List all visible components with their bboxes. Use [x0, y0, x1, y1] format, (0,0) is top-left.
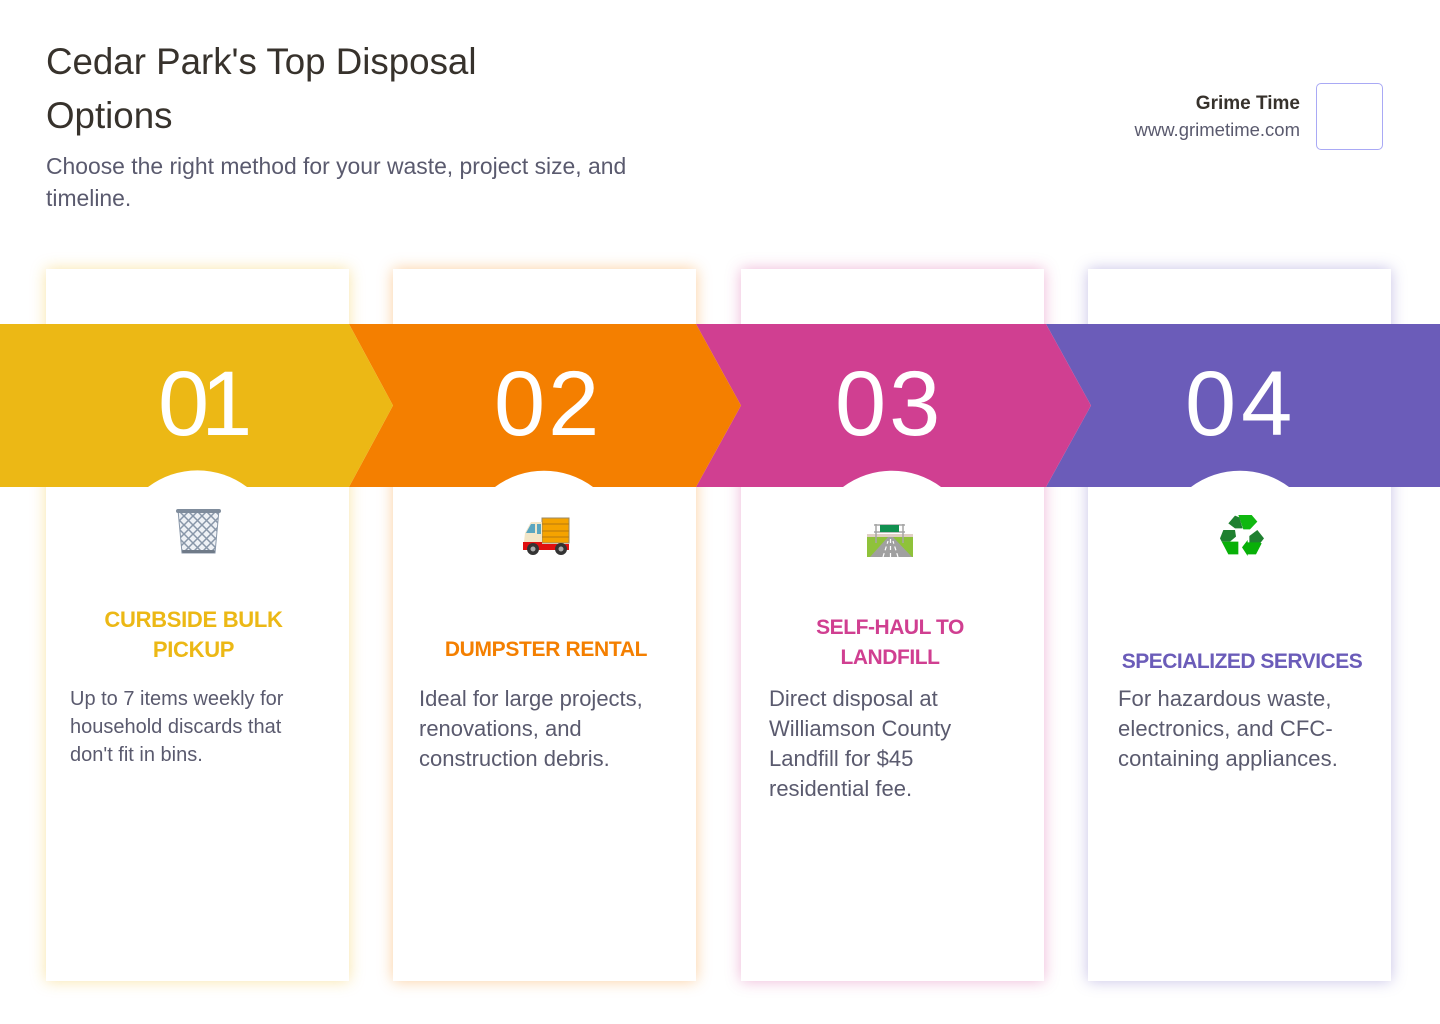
subtitle: Choose the right method for your waste, project size, and [46, 153, 626, 179]
subtitle [46, 153, 626, 211]
number 04: 04 [1185, 353, 1297, 455]
chevron band [0, 324, 1440, 487]
chevron 4 [1046, 324, 1440, 487]
card 3 heading [816, 616, 964, 669]
card 4 heading: SPECIALIZED SERVICES [1122, 650, 1362, 673]
card 4 description: electronics, and CFC- [1118, 716, 1333, 741]
card 3 description: Landfill for $45 [769, 746, 913, 771]
chevron 1 [0, 324, 393, 487]
card 3 background [741, 269, 1044, 981]
card 3 description: residential fee. [769, 776, 912, 801]
card 2 heading: DUMPSTER RENTAL [445, 638, 647, 661]
card 1 description [70, 688, 284, 766]
card 3 description: Williamson County [769, 716, 951, 741]
card 2 description: Ideal for large projects, [419, 686, 643, 711]
card 1 heading [104, 607, 283, 662]
card 1 description: household discards that [70, 716, 281, 738]
brand url: www.grimetime.com [1134, 119, 1300, 140]
card 3 heading: SELF-HAUL TO [816, 616, 964, 639]
card 1 heading: PICKUP [153, 637, 234, 662]
subtitle: timeline. [46, 185, 131, 211]
brand block [1134, 83, 1383, 150]
icon: motorway [867, 524, 913, 557]
card 1 description: don't fit in bins. [70, 744, 203, 766]
card 4 background [1088, 269, 1391, 981]
chevron 2 [349, 324, 741, 487]
card 3 heading: LANDFILL [840, 646, 940, 669]
number 02: 02 [494, 353, 602, 455]
card 1 background [46, 269, 349, 981]
title: Options [46, 95, 172, 136]
card 1 description: Up to 7 items weekly for [70, 688, 283, 710]
card 4 description: For hazardous waste, [1118, 686, 1332, 711]
icon: wastebasket [176, 509, 221, 554]
icon: recycling symbol [1220, 515, 1264, 556]
card 2 description: construction debris. [419, 746, 610, 771]
card 4 description: containing appliances. [1118, 746, 1338, 771]
logo placeholder [1316, 83, 1383, 150]
card 2 background [393, 269, 696, 981]
card 4 description [1118, 686, 1338, 771]
number 01: 01 [158, 353, 244, 455]
card 3 description [769, 686, 951, 801]
card 1 heading: CURBSIDE BULK [104, 607, 283, 632]
title: Cedar Park's Top Disposal [46, 41, 476, 82]
icon: delivery truck [523, 518, 570, 555]
number 03: 03 [835, 353, 943, 455]
card 2 description: renovations, and [419, 716, 582, 741]
title [46, 41, 476, 136]
card 2 description [419, 686, 643, 771]
brand name: Grime Time [1196, 93, 1300, 114]
card 3 description: Direct disposal at [769, 686, 938, 711]
chevron 3 [696, 324, 1091, 487]
